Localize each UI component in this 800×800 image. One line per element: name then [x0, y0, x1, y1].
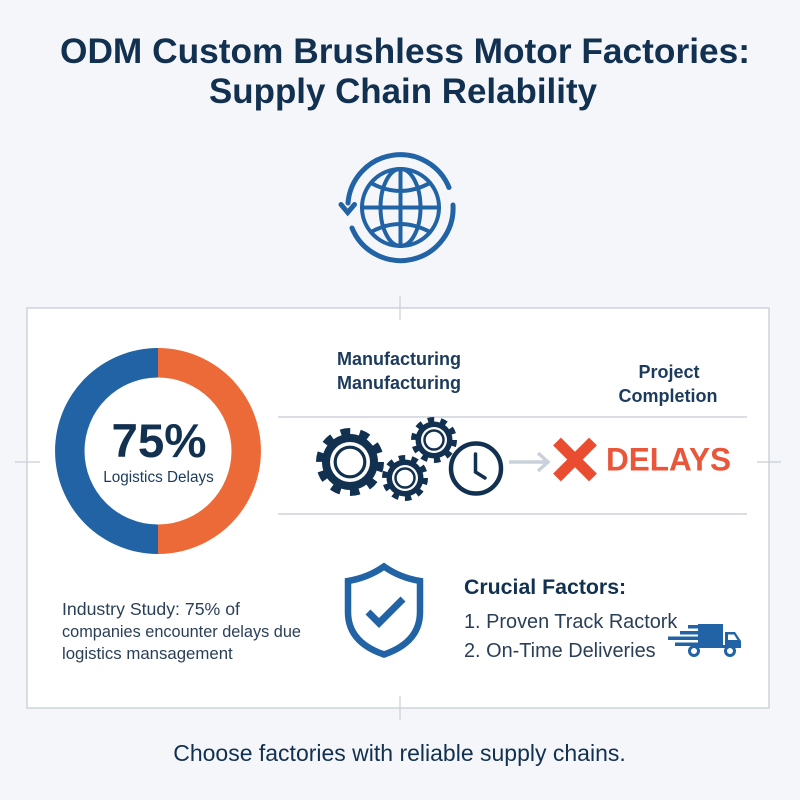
title [60, 32, 750, 111]
title: ODM Custom Brushless Motor Factories: [60, 32, 750, 71]
heading: project completion: Project [638, 362, 700, 382]
crucial factors list: 1. Proven Track Ractork [464, 611, 677, 633]
panel [15, 296, 781, 720]
icon: x mark [557, 442, 593, 478]
heading: manufacturing: Manufacturing [337, 373, 461, 393]
heading: manufacturing: Manufacturing [337, 349, 461, 369]
heading: project completion: Completion [618, 386, 718, 406]
donut chart [55, 348, 261, 554]
icon: small gear [385, 458, 425, 498]
icon: truck [668, 624, 741, 656]
footer text: Choose factories with reliable supply chains. [173, 740, 626, 766]
icon: clock [451, 444, 501, 494]
heading: manufacturing [337, 349, 461, 393]
crucial factors heading: Crucial Factors: [464, 575, 626, 599]
delays label: DELAYS [606, 442, 731, 478]
icon: top gear [414, 420, 454, 460]
dividers [278, 417, 747, 514]
heading: project completion [618, 362, 718, 406]
study text: Industry Study: 75% of [62, 599, 240, 619]
donut value: 75% [111, 415, 207, 468]
arrow [509, 453, 548, 471]
icon: shield [348, 566, 420, 654]
crucial factors list: 2. On-Time Deliveries [464, 640, 656, 662]
icon: globe with circular arrow [341, 155, 453, 261]
study text [62, 599, 301, 663]
icon: large gear [320, 432, 380, 492]
study text: companies encounter delays due [62, 623, 301, 641]
donut label: Logistics Delays [103, 469, 214, 486]
title: Supply Chain Relability [209, 72, 598, 111]
study text: logistics mansagement [62, 644, 233, 663]
crucial factors list [464, 611, 677, 662]
